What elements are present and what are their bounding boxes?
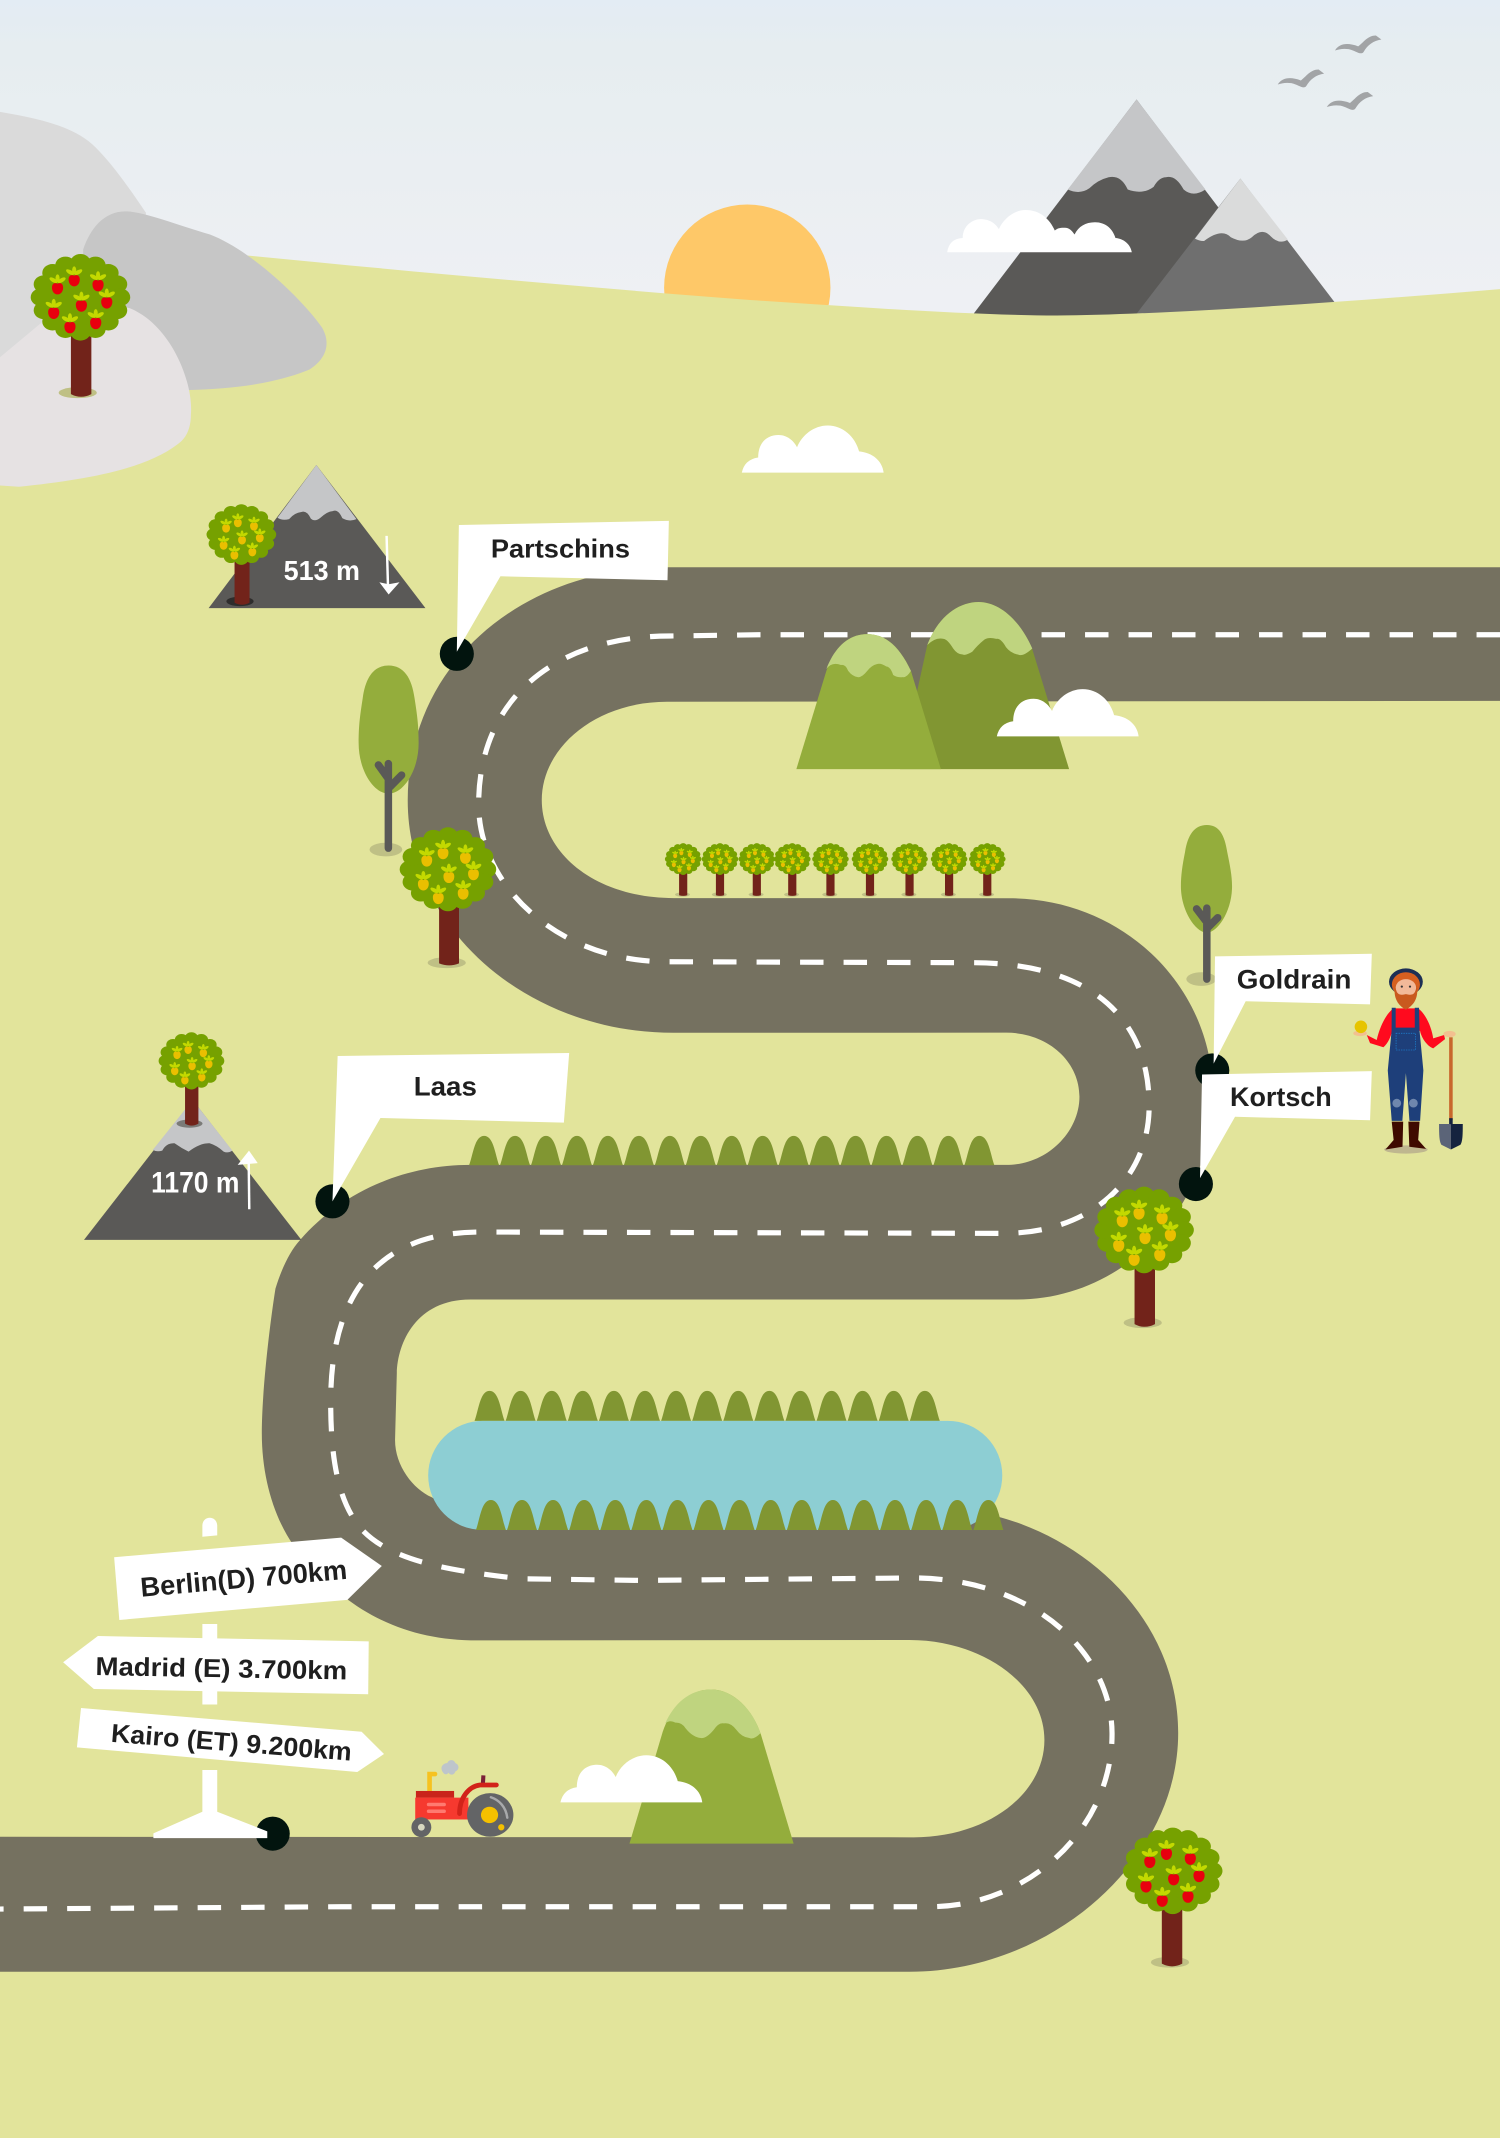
apple tree: on 1170 m mountain: [159, 1032, 224, 1128]
cloud: field: [742, 425, 884, 473]
stop dot: Laas: [315, 1184, 349, 1218]
apple tree: Kortsch: [1094, 1187, 1194, 1328]
stop dot: signpost: [256, 1817, 290, 1851]
stop dot: Kortsch: [1179, 1167, 1213, 1201]
smoke: [441, 1760, 459, 1775]
post: [153, 1518, 267, 1838]
text: 513 m: 513 m: [284, 555, 360, 586]
green mountain with cloud: bottom: [560, 1690, 794, 1844]
bush row: upper road: [469, 1136, 994, 1165]
callout: Kortsch: [1200, 1071, 1372, 1178]
grey hills: [0, 112, 327, 487]
arrow: up: [248, 1163, 250, 1209]
sky background: [0, 0, 1500, 327]
birds: [1278, 35, 1381, 110]
callout: Goldrain: [1214, 954, 1372, 1064]
tractor: [411, 1760, 513, 1837]
road centre dashes: [0, 635, 1500, 1909]
cloud: sky: [947, 210, 1132, 252]
mountain 513 m: [209, 465, 425, 608]
sign: Madrid: [63, 1636, 369, 1694]
arrow: down: [387, 536, 388, 585]
apple tree: left big: [400, 827, 496, 968]
orchard row: [665, 843, 1006, 897]
callout: Laas: Laas: [414, 1072, 477, 1102]
sign: Berlin: [114, 1538, 382, 1620]
bush row: lake bottom: [476, 1500, 1003, 1530]
callout: Partschins: [457, 521, 669, 652]
apple tree: red on hills: [31, 254, 130, 398]
sun: [664, 205, 830, 371]
callout: Goldrain: Goldrain: [1237, 965, 1351, 995]
callout: Partschins: Partschins: [491, 536, 630, 564]
sign: Berlin: Berlin(D) 700km: [139, 1554, 348, 1603]
apple tree: on 513 m mountain: [207, 504, 276, 606]
stop dot: Partschins: [440, 637, 474, 671]
sign: Kairo: Kairo (ET) 9.200km: [110, 1720, 353, 1767]
mountain 1170 m: [84, 1100, 301, 1240]
shovel: [1439, 1037, 1463, 1150]
lake: [428, 1421, 1002, 1530]
stop dot: Goldrain: [1195, 1053, 1229, 1087]
arrow head: down: [379, 582, 400, 595]
callout: Laas: [332, 1053, 569, 1201]
road: [0, 567, 1500, 1972]
far mountains: [972, 100, 1335, 316]
poplar tree: right: [1181, 825, 1232, 986]
signpost: [63, 1518, 384, 1838]
callout: Kortsch: Kortsch: [1230, 1082, 1332, 1112]
arrow head: up: [238, 1151, 258, 1165]
poplar tree: left: [359, 665, 419, 856]
farmer: [1353, 968, 1463, 1154]
sign: Madrid: Madrid (E) 3.700km: [95, 1653, 347, 1685]
sign: Kairo: [77, 1708, 384, 1772]
bush row: lake top: [475, 1391, 940, 1421]
green mountains with cloud: [796, 602, 1139, 769]
text: 1170 m: 1170 m: [151, 1167, 239, 1200]
apple tree: bottom right red: [1123, 1828, 1222, 1968]
